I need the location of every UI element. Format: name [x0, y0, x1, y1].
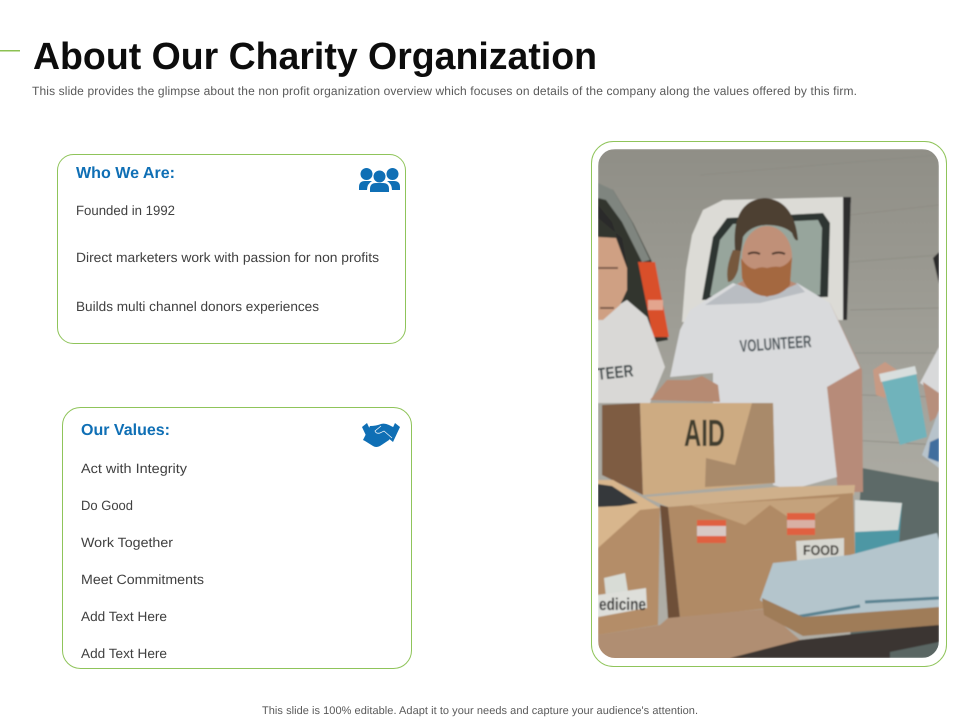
text: value 1: Act with Integrity	[81, 461, 187, 476]
footer note: This slide is 100% editable. Adapt it to your needs and capture your audience's attention.	[262, 705, 698, 717]
photo: volunteers with boxes: VOLUNTEER	[739, 332, 812, 356]
text: builds: Builds multi channel donors experiences	[76, 299, 319, 314]
subtitle: This slide provides the glimpse about the non profit organization overview which focuses on details of the company along the values offered by this firm.	[32, 84, 857, 98]
text: founded: Founded in 1992	[76, 203, 175, 218]
text: value 3: Work Together	[81, 535, 174, 550]
photo: volunteers with boxes: edicine	[599, 595, 646, 614]
accent line	[0, 50, 20, 52]
panel: photo frame	[592, 142, 946, 666]
icon: handshake	[362, 423, 400, 447]
title: About Our Charity Organization	[33, 36, 597, 78]
heading: who we are: Who We Are:	[76, 165, 175, 182]
photo: volunteers with boxes	[596, 149, 939, 660]
photo: volunteers with boxes: AID	[684, 413, 725, 455]
text: value 5: Add Text Here	[81, 609, 167, 624]
photo: volunteers with boxes: TEER	[596, 361, 634, 384]
text: direct marketers: Direct marketers work with passion for non profits	[76, 250, 379, 265]
text: value 2: Do Good	[81, 498, 133, 513]
panel: our values	[62, 408, 412, 668]
photo: volunteers with boxes: FOOD	[803, 542, 839, 558]
icon: people	[359, 168, 400, 192]
text: value 4: Meet Commitments	[81, 572, 204, 587]
text: value 6: Add Text Here	[81, 646, 167, 661]
heading: our values: Our Values:	[81, 422, 170, 439]
panel: who we are	[58, 154, 406, 344]
